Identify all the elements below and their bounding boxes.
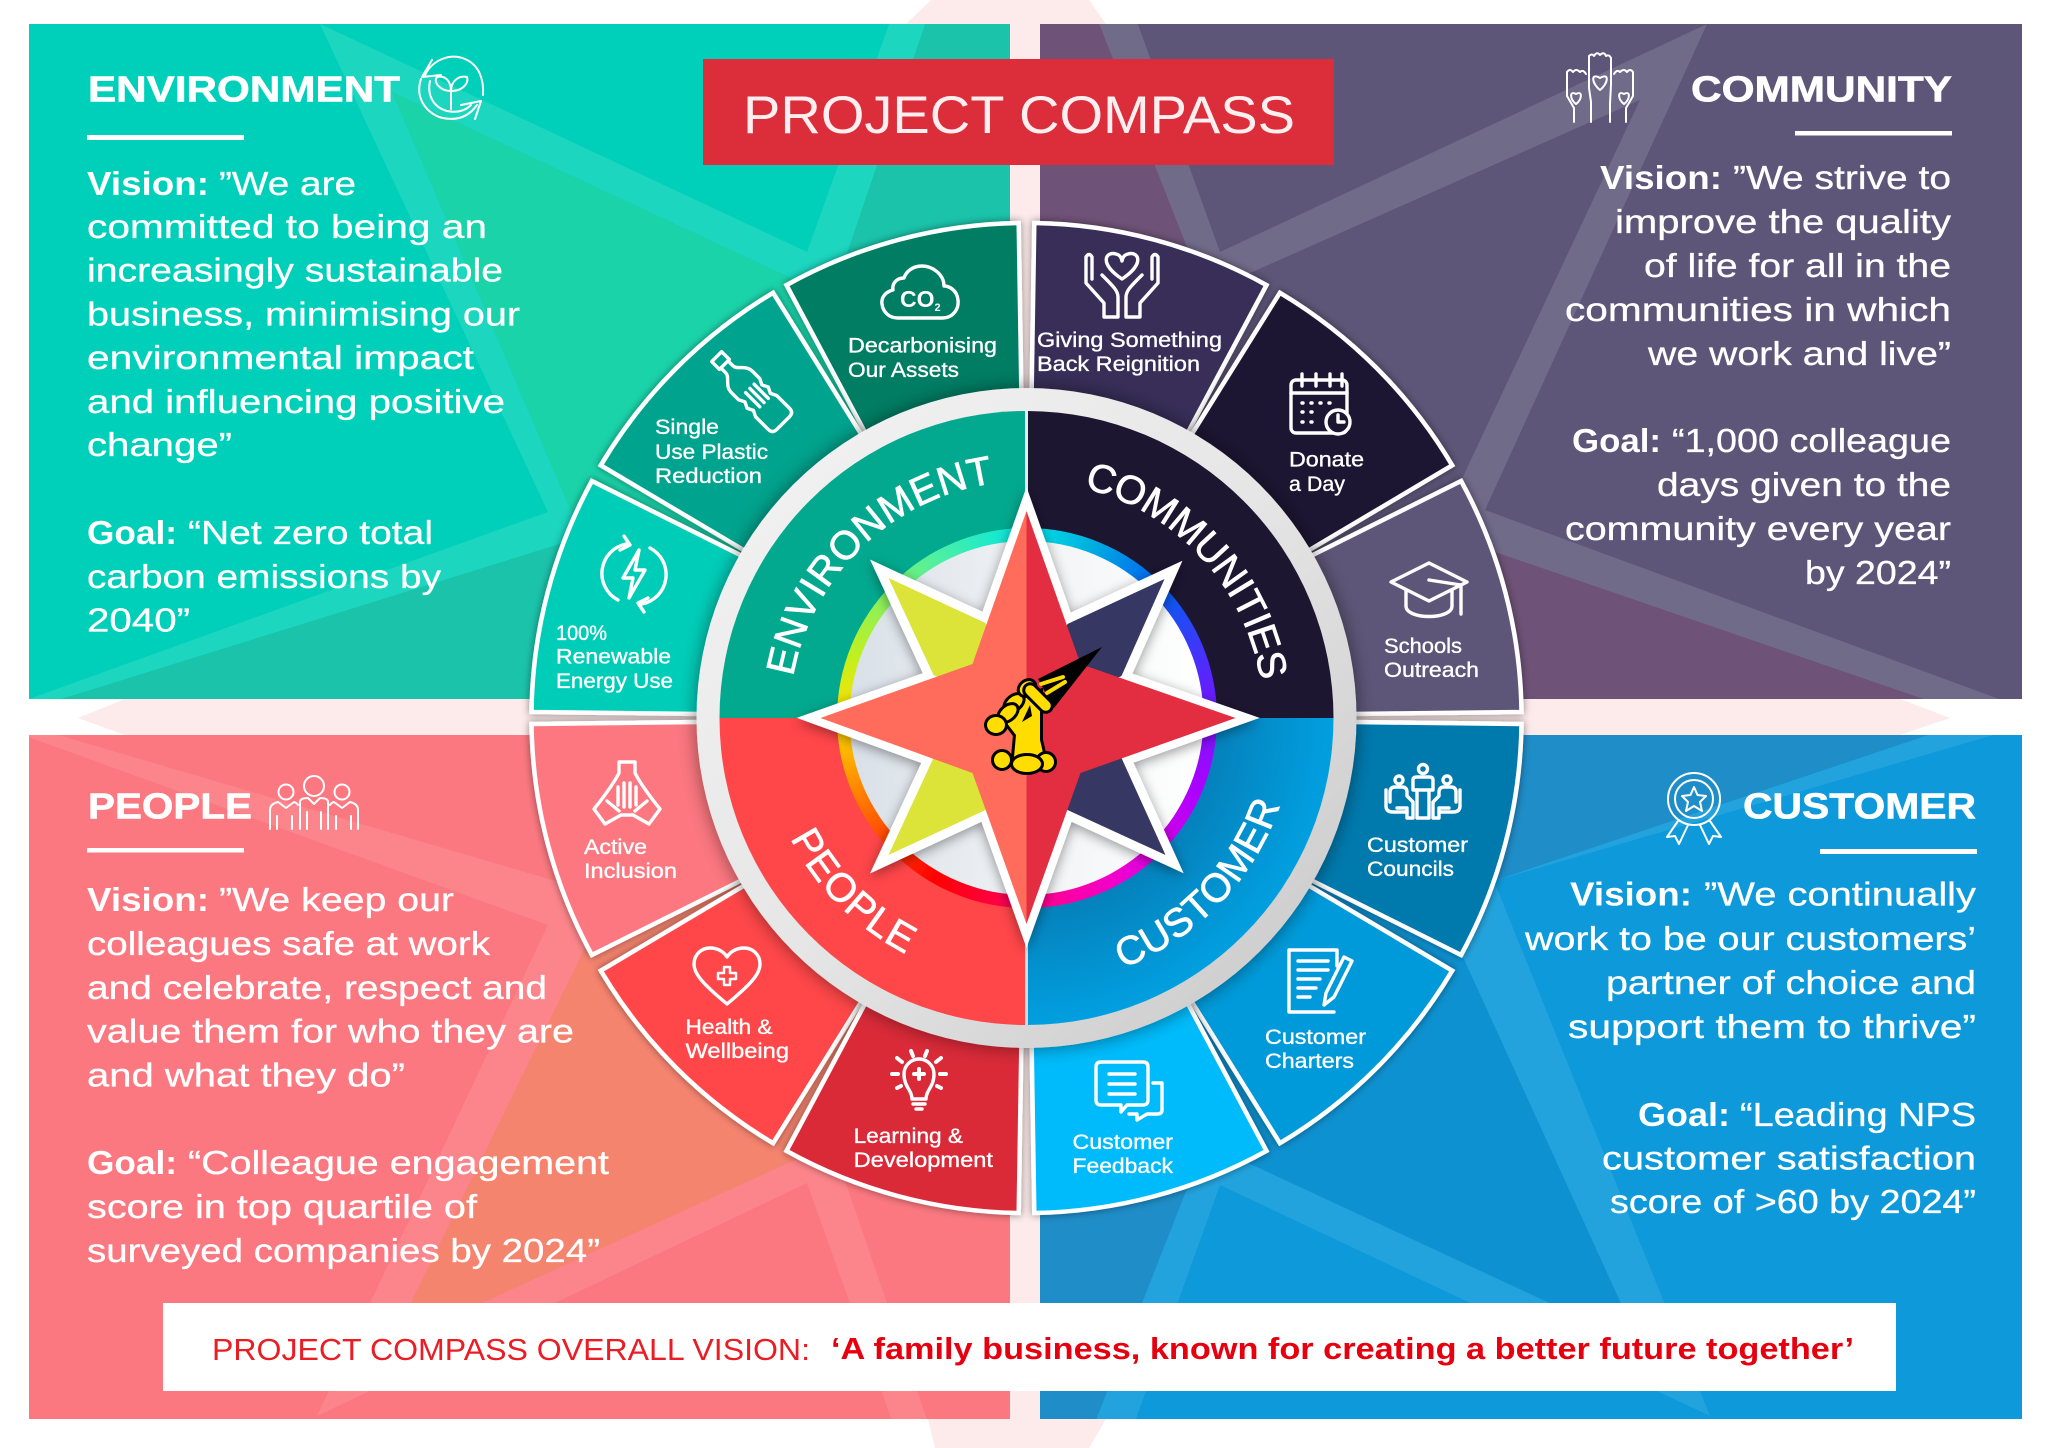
segment: active inclusion <box>532 722 744 955</box>
text: people goal <box>87 1144 609 1269</box>
text: environment vision: change” <box>87 426 232 463</box>
text: community vision: of life for all in the <box>1644 247 1951 284</box>
title banner <box>703 59 1334 165</box>
star diagonal points <box>888 578 1166 855</box>
compass wheel <box>524 216 1529 1220</box>
text: environment vision: ”We are <box>219 165 356 202</box>
text: community vision: communities in which <box>1565 291 1951 328</box>
text: environment vision: business, minimising our <box>87 296 520 332</box>
segment: decarbonising our assets <box>786 223 1021 435</box>
segment: learning and development <box>786 1001 1021 1213</box>
segment: learning and development: Development <box>854 1149 993 1172</box>
segment: customer charters <box>1190 884 1452 1143</box>
text: customer vision: ”We continually <box>1704 876 1977 912</box>
icon: recycle sprout <box>419 57 483 119</box>
text: people vision: and celebrate, respect and <box>87 969 547 1006</box>
text: customer vision: work to be our customers’ <box>1524 920 1976 957</box>
overall vision bar <box>163 1303 1896 1391</box>
heading: people: PEOPLE <box>88 786 252 827</box>
text: customer vision: support them to thrive” <box>1568 1008 1976 1045</box>
segment: health and wellbeing: Health & <box>686 1016 772 1039</box>
segment: donate a day <box>1190 293 1452 552</box>
segment: health and wellbeing <box>601 884 863 1143</box>
segment: schools outreach <box>1309 481 1522 714</box>
segment: 100% renewable energy use: Energy Use <box>556 670 673 693</box>
text: environment vision <box>87 165 520 463</box>
text: environment goal: “Net zero total <box>188 514 433 551</box>
segment: giving something back reignition: Back Reignition <box>1037 353 1200 376</box>
segment: customer feedback <box>1032 1001 1266 1213</box>
segment: decarbonising our assets: Decarbonising <box>848 335 997 358</box>
heading: community: COMMUNITY <box>1691 69 1952 110</box>
segment: single use plastic reduction: Single <box>655 416 719 439</box>
text: people vision <box>87 881 574 1093</box>
icon: chat bubbles <box>1096 1062 1162 1120</box>
text: customer goal: Goal: <box>1638 1096 1730 1133</box>
icon: CO2 cloud <box>882 266 958 318</box>
text: customer vision: partner of choice and <box>1606 964 1976 1001</box>
segment: schools outreach: Outreach <box>1384 659 1479 682</box>
curved label: environment: ENVIRONMENT <box>766 456 989 674</box>
text: customer goal: customer satisfaction <box>1602 1140 1976 1176</box>
text: customer vision <box>1524 876 1977 1045</box>
rule <box>87 848 244 852</box>
text: environment vision: committed to being an <box>87 208 487 245</box>
text: people vision: ”We keep our <box>219 881 454 918</box>
icon: graduation cap <box>1391 563 1467 616</box>
text: community vision: Vision: <box>1600 159 1722 196</box>
segment: donate a day: a Day <box>1289 473 1346 496</box>
curved label: communities: COMMUNITIES <box>1088 464 1286 678</box>
text: environment goal: carbon emissions by <box>87 558 442 595</box>
segment: 100% renewable energy use: Renewable <box>556 646 671 668</box>
text: environment vision: Vision: <box>87 165 209 202</box>
icon: renewable energy bolt <box>602 536 666 612</box>
segment: single use plastic reduction: Use Plastic <box>655 441 768 464</box>
icon: charter document and pen <box>1289 950 1352 1012</box>
inner compass disc <box>850 541 1204 895</box>
icon: joined hands <box>594 762 660 824</box>
rainbow ring <box>836 528 1216 908</box>
icon: three people <box>270 776 358 829</box>
segment: single use plastic reduction <box>601 293 863 552</box>
text: community vision: improve the quality <box>1615 203 1952 240</box>
text: people goal: score in top quartile of <box>87 1188 478 1225</box>
text: people vision: Vision: <box>87 881 209 918</box>
segment: donate a day: Donate <box>1289 448 1364 472</box>
segment: active inclusion: Active <box>584 836 647 859</box>
text: community goal: days given to the <box>1657 466 1951 503</box>
segment: giving something back reignition: Giving Something <box>1037 329 1222 352</box>
icon: meeting table <box>1386 764 1460 818</box>
text: community vision <box>1565 159 1952 372</box>
icon: lightbulb with plus <box>892 1051 946 1109</box>
segment: customer charters: Customer <box>1265 1026 1366 1049</box>
star white outlines <box>820 511 1236 924</box>
segment: learning and development: Learning & <box>854 1125 963 1148</box>
segment: single use plastic reduction: Reduction <box>655 465 762 488</box>
text: environment goal: Goal: <box>87 514 177 551</box>
icon: hands holding heart <box>1086 254 1158 317</box>
text: community vision: ”We strive to <box>1733 159 1951 196</box>
text: environment goal <box>87 514 442 638</box>
rule <box>87 135 244 140</box>
text: community goal: by 2024” <box>1805 554 1951 591</box>
segment: customer councils: Councils <box>1367 858 1454 881</box>
text: people vision: colleagues safe at work <box>87 925 491 962</box>
star cardinal points <box>820 511 1236 924</box>
text: customer goal <box>1602 1096 1976 1220</box>
segment: giving something back reignition <box>1032 223 1266 435</box>
curved label: people: PEOPLE <box>791 827 918 954</box>
segment: customer councils <box>1309 722 1522 955</box>
icon: heart with cross <box>694 948 760 1004</box>
text: community goal: community every year <box>1565 510 1951 547</box>
rule <box>1795 131 1952 136</box>
text: people vision: and what they do” <box>87 1056 405 1093</box>
text: people goal: “Colleague engagement <box>188 1144 609 1181</box>
segment: customer councils: Customer <box>1367 834 1468 857</box>
overall vision bar: ‘A family business, known for creating a better future together’ <box>831 1331 1854 1366</box>
icon: plastic bottle <box>706 346 794 434</box>
text: people goal: surveyed companies by 2024” <box>87 1232 600 1269</box>
inner disc quadrants <box>720 411 1334 1025</box>
text: community goal: Goal: <box>1572 422 1661 459</box>
logo: hand holding dagger <box>987 647 1102 772</box>
text: customer goal: score of >60 by 2024” <box>1610 1183 1976 1220</box>
curved label: customer: CUSTOMER <box>1116 800 1280 964</box>
text: community goal <box>1565 422 1951 591</box>
icon: raised hands with hearts <box>1567 53 1633 122</box>
segment: active inclusion: Inclusion <box>584 860 677 883</box>
text: customer vision: Vision: <box>1570 876 1692 912</box>
rule <box>1820 849 1977 854</box>
icon: CO2 cloud: 2 <box>934 302 941 314</box>
text: customer goal: “Leading NPS <box>1740 1096 1976 1133</box>
icon: CO2 cloud: CO <box>900 286 934 312</box>
heading: customer: CUSTOMER <box>1743 786 1976 827</box>
segment: 100% renewable energy use: 100% <box>556 622 607 645</box>
silver ring <box>696 388 1356 1048</box>
text: environment vision: increasingly sustainable <box>87 252 503 289</box>
text: community vision: we work and live” <box>1647 335 1951 372</box>
segment: customer feedback: Customer <box>1072 1131 1173 1154</box>
segment: customer feedback: Feedback <box>1072 1155 1174 1178</box>
text: community goal: “1,000 colleague <box>1672 422 1951 459</box>
text: environment vision: and influencing positive <box>87 383 505 420</box>
overall vision bar: PROJECT COMPASS OVERALL VISION: <box>212 1332 810 1367</box>
segment: 100% renewable energy use <box>532 481 744 714</box>
icon: calendar <box>1291 374 1350 434</box>
icon: award rosette <box>1667 773 1721 844</box>
segment: schools outreach: Schools <box>1384 635 1462 658</box>
text: people goal: Goal: <box>87 1144 177 1181</box>
text: people vision: value them for who they are <box>87 1012 574 1050</box>
title banner: PROJECT COMPASS <box>743 86 1295 145</box>
text: environment vision: environmental impact <box>87 339 474 376</box>
text: environment goal: 2040” <box>87 602 190 638</box>
heading: environment: ENVIRONMENT <box>88 69 400 110</box>
segment: decarbonising our assets: Our Assets <box>848 359 959 382</box>
segment: customer charters: Charters <box>1265 1050 1354 1073</box>
segment: health and wellbeing: Wellbeing <box>686 1040 789 1063</box>
compass star <box>820 511 1236 924</box>
